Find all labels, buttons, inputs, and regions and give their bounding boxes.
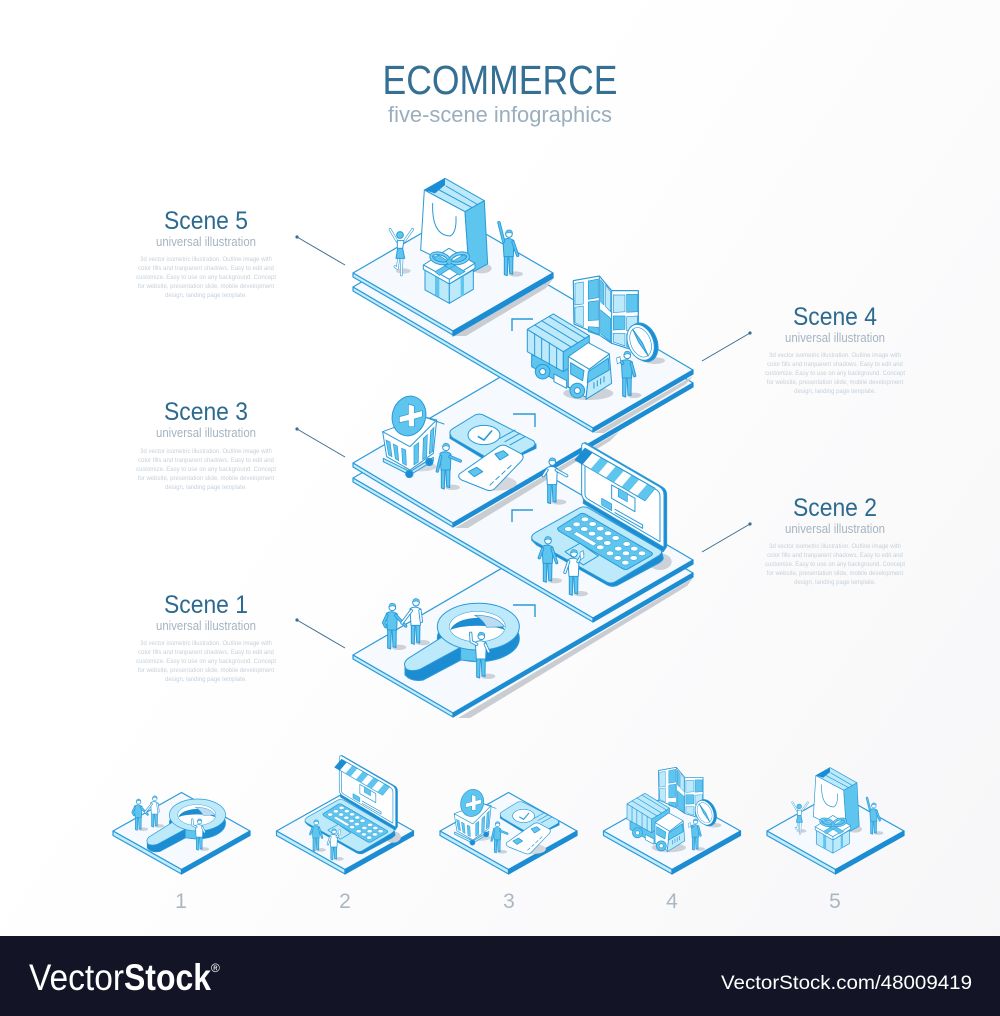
text block: scene 4: for website, presentation slide, mobile development: [767, 380, 904, 386]
text block: scene 1: customize. Easy to use on any background. Concept: [136, 659, 276, 665]
platform: scene 5: [353, 215, 553, 336]
subtitle: five-scene infographics: [388, 102, 612, 127]
text block: scene 3: for website, presentation slide, mobile development: [138, 476, 275, 482]
footer image id: VectorStock.com/48009419: [721, 972, 972, 994]
platform: scene 3: [353, 323, 693, 528]
illustration: scene 2 laptop and people: [532, 442, 672, 596]
thumbnail: scene 2: [276, 755, 414, 874]
thumbnail numbers: 3: [503, 890, 515, 913]
text block: scene 3: color fills and tranparent shadows. Easy to edit and: [138, 458, 274, 464]
text block: scene 2: [765, 494, 905, 586]
text block: scene 1: design, landing page template.: [165, 677, 247, 683]
footer logo: ®: [211, 961, 220, 975]
person: man waving: [499, 223, 523, 277]
person: standing at scene 2 back: [543, 458, 567, 505]
bracket: scene 3: [513, 414, 535, 427]
text block: scene 4: [765, 303, 905, 395]
thumbnail numbers: 5: [829, 890, 841, 913]
text block: scene 5: Scene 5: [164, 207, 248, 235]
person: with phone: [617, 351, 641, 398]
footer bar: [0, 936, 1000, 1016]
text block: scene 4: customize. Easy to use on any background. Concept: [765, 371, 905, 377]
text block: scene 3: universal illustration: [156, 426, 256, 440]
thumbnail: scene 3: [440, 787, 577, 874]
icon: shopping bag: [421, 178, 492, 274]
text block: scene 2: design, landing page template.: [794, 580, 876, 586]
platform: scene 2: [353, 420, 693, 622]
icon: compass: [622, 319, 665, 366]
thumbnail: scene 4: [604, 767, 740, 874]
leader line: scene 1: [295, 618, 345, 648]
thumbnail: scene 5: [767, 768, 904, 874]
text block: scene 1: for website, presentation slide, mobile development: [138, 668, 275, 674]
leader line: scene 3: [295, 427, 345, 457]
text block: scene 1: [136, 591, 276, 683]
bracket: scene 4: [512, 319, 533, 331]
person: left: [539, 537, 562, 583]
text block: scene 5: [136, 207, 276, 299]
text block: scene 5: customize. Easy to use on any background. Concept: [136, 275, 276, 281]
text block: scene 5: design, landing page template.: [165, 293, 247, 299]
text block: scene 4: Scene 4: [793, 303, 877, 331]
icon: gift box: [423, 248, 475, 303]
thumbnail numbers: 2: [339, 890, 351, 913]
text block: scene 2: universal illustration: [785, 522, 885, 536]
text block: scene 4: 3d vector isometric illustration. Outline image with: [769, 353, 901, 359]
text block: scene 1: 3d vector isometric illustration. Outline image with: [140, 641, 272, 647]
text block: scene 4: universal illustration: [785, 331, 885, 345]
text block: scene 5: for website, presentation slide, mobile development: [138, 284, 275, 290]
icon: credit card: [459, 445, 523, 491]
text block: scene 3: 3d vector isometric illustration. Outline image with: [140, 449, 272, 455]
text block: scene 3: design, landing page template.: [165, 485, 247, 491]
footer logo: VectorStock: [29, 957, 225, 998]
text block: scene 2: 3d vector isometric illustration. Outline image with: [769, 544, 901, 550]
icon: laptop: [532, 442, 672, 586]
thumbnail numbers: 4: [666, 890, 678, 913]
person: woman: [437, 443, 460, 490]
text block: scene 3: [136, 398, 276, 491]
text block: scene 3: Scene 3: [164, 398, 248, 426]
leader line: scene 5: [295, 235, 345, 265]
icon: folded map: [573, 276, 638, 352]
platform: scene 1: [353, 515, 693, 718]
illustration: scene 4 truck, map, compass, person: [527, 276, 665, 400]
icon: delivery truck: [527, 314, 613, 400]
text block: scene 1: Scene 1: [164, 591, 248, 619]
text block: scene 1: universal illustration: [156, 619, 256, 633]
icon: shop awning: [575, 448, 655, 501]
icon: magnifier: [405, 603, 519, 681]
person: right: [565, 550, 588, 596]
person: front: [471, 632, 495, 679]
illustration: scene 1 magnifier and people: [384, 599, 519, 681]
person: right: [402, 599, 430, 645]
thumbnail: scene 1: [113, 792, 250, 874]
text block: scene 5: 3d vector isometric illustration. Outline image with: [140, 257, 272, 263]
thumbnail numbers: 1: [175, 890, 187, 913]
title: ECOMMERCE: [382, 57, 618, 103]
text block: scene 1: color fills and tranparent shadows. Easy to edit and: [138, 650, 274, 656]
leader line: scene 2: [702, 522, 752, 552]
person: left: [384, 603, 406, 650]
thumbnail numbers: [175, 890, 841, 913]
text block: scene 2: for website, presentation slide, mobile development: [767, 571, 904, 577]
leader line: scene 4: [702, 331, 752, 361]
text block: scene 4: color fills and tranparent shadows. Easy to edit and: [767, 362, 903, 368]
person: woman cheering: [390, 229, 413, 275]
text block: scene 5: color fills and tranparent shadows. Easy to edit and: [138, 266, 274, 272]
text block: scene 2: color fills and tranparent shadows. Easy to edit and: [767, 553, 903, 559]
text block: scene 5: universal illustration: [156, 235, 256, 249]
text block: scene 4: design, landing page template.: [794, 389, 876, 395]
icon: shopping cart: [383, 392, 444, 478]
text block: scene 3: customize. Easy to use on any background. Concept: [136, 467, 276, 473]
illustration: scene 5 bag, gift, people: [390, 178, 523, 303]
icon: payment phone: [450, 414, 536, 467]
bracket: scene 1: [513, 605, 535, 617]
platform: scene 4: [353, 229, 693, 433]
text block: scene 2: customize. Easy to use on any background. Concept: [765, 562, 905, 568]
text block: scene 2: Scene 2: [793, 494, 877, 522]
bracket: scene 2: [512, 510, 533, 522]
illustration: scene 3 cart, phone, card, person: [383, 392, 536, 491]
